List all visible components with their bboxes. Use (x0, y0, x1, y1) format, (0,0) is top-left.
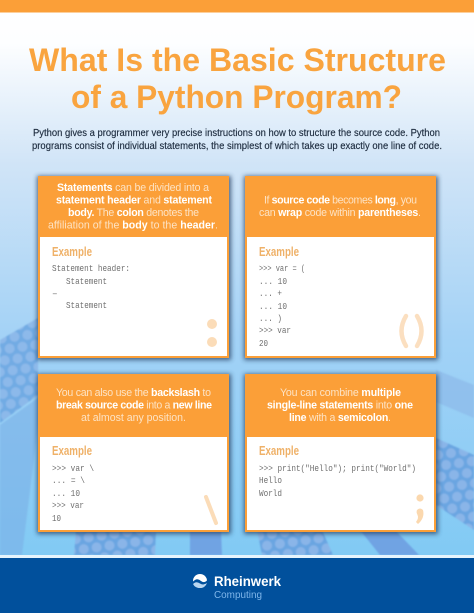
code example: ... + (259, 288, 282, 299)
code example: 20 (259, 338, 268, 349)
semicolon description (267, 387, 413, 424)
title: of a Python Program? (71, 79, 402, 115)
icon: parentheses (402, 316, 422, 346)
footer band (0, 555, 474, 613)
panel: semicolon (244, 374, 438, 534)
semicolon description: You can combine multiple (280, 387, 401, 399)
icon: semicolon (416, 494, 424, 524)
statements description: Statements can be divided into a (57, 182, 209, 194)
code example: ... 10 (52, 488, 80, 499)
code example: ... 10 (259, 301, 287, 312)
parentheses description (259, 194, 421, 219)
code example: ... ) (259, 313, 282, 324)
code example: Hello (259, 475, 282, 486)
logo subtitle: Computing (214, 589, 262, 601)
code example: ... 10 (259, 276, 287, 287)
panel: backslash (37, 374, 231, 534)
title: What Is the Basic Structure (29, 42, 446, 78)
code example: >>> var \ (52, 463, 94, 474)
code example: – (52, 288, 58, 299)
statements description (48, 182, 218, 232)
backslash description: You can also use the backslash to (56, 387, 211, 399)
example heading: Example (52, 245, 92, 259)
backslash description: at almost any position. (81, 412, 186, 424)
code example: >>> var (52, 500, 84, 511)
example heading: Example (259, 444, 299, 458)
code example: Statement (66, 276, 107, 287)
code example: >>> var = ( (259, 263, 305, 274)
example heading: Example (259, 245, 299, 259)
code example (259, 463, 416, 499)
code example: ... = \ (52, 475, 85, 486)
statements description: statement header and statement (56, 194, 212, 206)
logo wordmark: Rheinwerk (214, 573, 281, 589)
statements description: body. The colon denotes the (68, 207, 199, 219)
code example: 10 (52, 513, 61, 524)
code example (52, 463, 94, 524)
intro text: programs consist of individual statements, the simplest of which takes up exactly one line of code. (32, 141, 442, 152)
title (29, 42, 446, 115)
panel: statements (37, 176, 231, 360)
code example: Statement header: (52, 263, 130, 274)
intro text (32, 128, 442, 152)
icon: colon (207, 319, 217, 347)
backslash description (56, 387, 212, 424)
example heading: Example (52, 444, 92, 458)
semicolon description: line with a semicolon. (289, 412, 391, 424)
top orange band (0, 0, 474, 12)
code example: World (259, 488, 282, 499)
code example: >>> var (259, 325, 291, 336)
backslash description: break source code into a new line (56, 400, 212, 412)
intro text: Python gives a programmer very precise instructions on how to structure the source code. Python (33, 128, 440, 139)
code example: Statement (66, 300, 107, 311)
parentheses description: can wrap code within parentheses. (259, 207, 421, 219)
code example (52, 263, 130, 311)
code example (259, 263, 305, 349)
semicolon description: single-line statements into one (267, 400, 413, 412)
panel: parentheses (244, 176, 438, 360)
icon: backslash (206, 497, 216, 523)
parentheses description: If source code becomes long, you (264, 194, 417, 206)
code example: >>> print("Hello"); print("World") (259, 463, 416, 474)
icon: Rheinwerk logo (192, 574, 208, 588)
statements description: affiliation of the body to the header. (48, 220, 218, 232)
